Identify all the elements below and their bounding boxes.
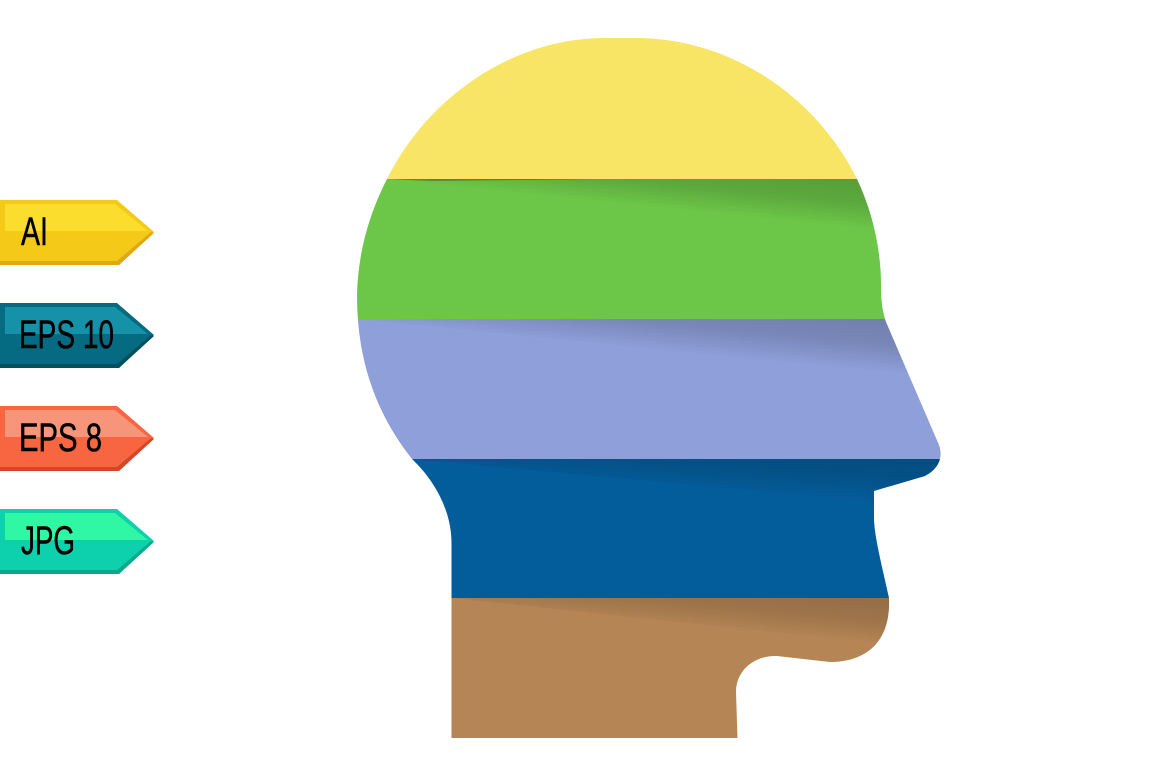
label: AI: AI — [21, 210, 48, 254]
band: blue — [412, 459, 940, 598]
tag: EPS 8 — [0, 406, 154, 471]
band: periwinkle — [340, 319, 960, 459]
band: brown — [452, 598, 890, 738]
tag: AI — [0, 200, 154, 265]
label: JPG: JPG — [21, 519, 75, 563]
label: EPS 10: EPS 10 — [19, 313, 114, 357]
tag: JPG — [0, 509, 154, 574]
label: EPS 8: EPS 8 — [19, 416, 102, 460]
head silhouette — [340, 30, 960, 743]
tag: EPS 10 — [0, 303, 154, 368]
band: yellow — [387, 38, 857, 179]
band: green — [357, 179, 885, 319]
